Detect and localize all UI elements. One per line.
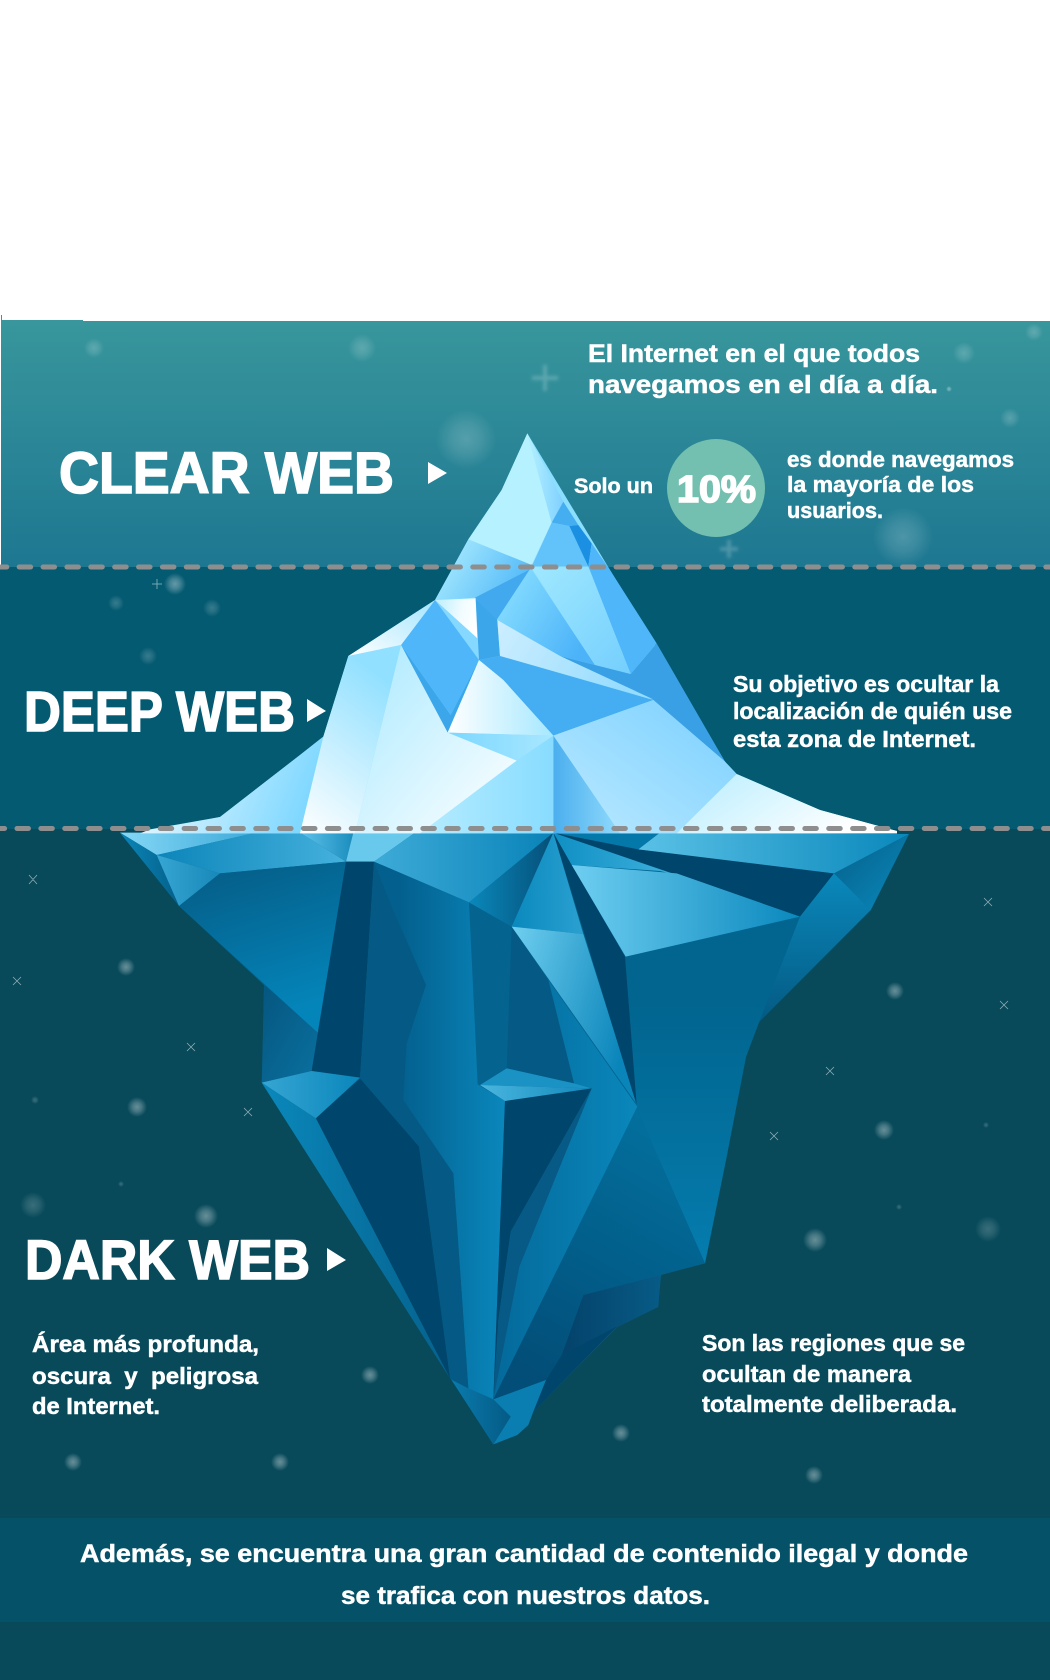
- arrow: dark web: [327, 1248, 346, 1271]
- callout: 10 percent: 10%: [677, 469, 756, 511]
- callout: 10 percent: usuarios.: [787, 498, 883, 523]
- arrow: clear web: [428, 462, 447, 484]
- callout: 10 percent: es donde navegamos: [787, 447, 1014, 472]
- background: dark web zone: [0, 829, 1050, 1680]
- text: dark web description right: ocultan de manera: [702, 1361, 911, 1387]
- text: dark web description right: Son las regiones que se: [702, 1330, 965, 1356]
- callout: 10 percent: [574, 439, 1014, 537]
- text: dark web description left: oscura y peligrosa: [32, 1363, 258, 1389]
- bottom band: Además, se encuentra una gran cantidad de contenido ilegal y donde: [80, 1540, 968, 1568]
- text: clear web description: [588, 340, 938, 399]
- iceberg: underwater part: [120, 833, 909, 1444]
- dashed waterline: deep / dark: [0, 826, 1050, 831]
- bottom band: [0, 1518, 1050, 1622]
- iceberg: [120, 433, 909, 1444]
- callout: 10 percent: Solo un: [574, 475, 653, 498]
- text: dark web description left: [32, 1330, 259, 1419]
- iceberg: part above water: [140, 433, 897, 833]
- text: clear web description: navegamos en el día a día.: [588, 371, 938, 399]
- background: clear web zone: [1, 315, 1050, 567]
- bottom band: se trafica con nuestros datos.: [341, 1582, 710, 1610]
- background: deep web zone: [0, 567, 1050, 829]
- arrow: deep web: [307, 699, 326, 722]
- callout: 10 percent: la mayoría de los: [787, 472, 974, 497]
- text: dark web description right: totalmente deliberada.: [702, 1391, 957, 1417]
- dashed waterline: clear / deep: [0, 564, 1050, 570]
- text: deep web description: [733, 671, 1012, 752]
- heading: clear web: CLEAR WEB: [59, 441, 394, 506]
- text: dark web description right: [702, 1330, 965, 1417]
- text: deep web description: localización de quién use: [733, 698, 1012, 724]
- text: dark web description left: Área más profunda,: [32, 1330, 259, 1357]
- heading: deep web: DEEP WEB: [24, 680, 295, 744]
- text: clear web description: El Internet en el que todos: [588, 340, 920, 368]
- text: deep web description: esta zona de Internet.: [733, 726, 976, 752]
- text: deep web description: Su objetivo es ocultar la: [733, 671, 999, 697]
- background glows and stars: [13, 323, 1043, 1484]
- text: dark web description left: de Internet.: [32, 1393, 160, 1419]
- heading: dark web: DARK WEB: [25, 1228, 310, 1291]
